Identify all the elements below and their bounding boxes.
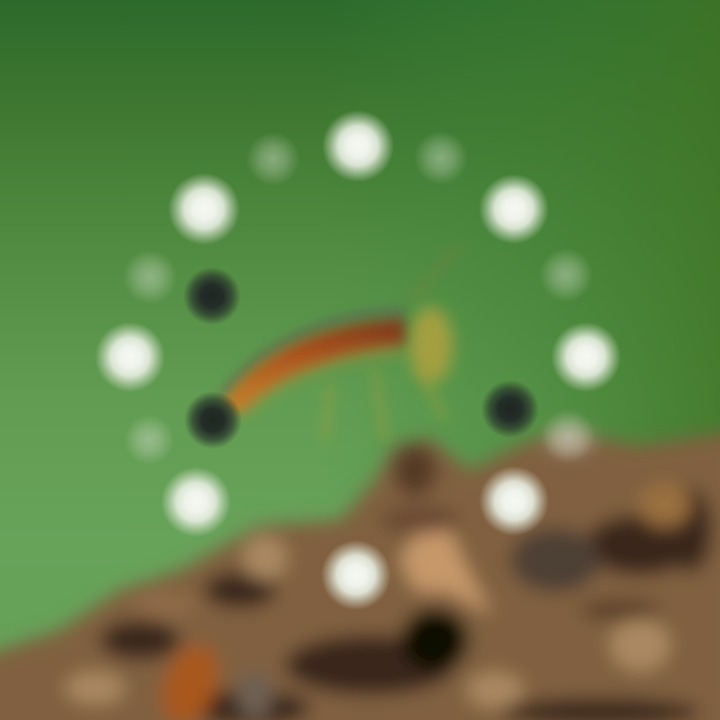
soil texture: warm light clods (65, 426, 691, 719)
insect legs (325, 245, 460, 440)
insect body: orange glow (240, 350, 400, 412)
soil shadow: dark hole (401, 608, 469, 672)
insect (222, 245, 460, 440)
insect back: grey edge (222, 312, 405, 396)
faint dots ring (123, 131, 595, 465)
dark dots (183, 267, 539, 449)
soil mound (0, 426, 720, 720)
soil accent: orange clod (151, 637, 229, 720)
soil texture: dark clods (100, 444, 712, 720)
insect body (222, 318, 405, 414)
bright dots ring (95, 110, 621, 610)
insect head: yellow (409, 307, 453, 383)
soil highlight: pale chip (400, 530, 492, 615)
